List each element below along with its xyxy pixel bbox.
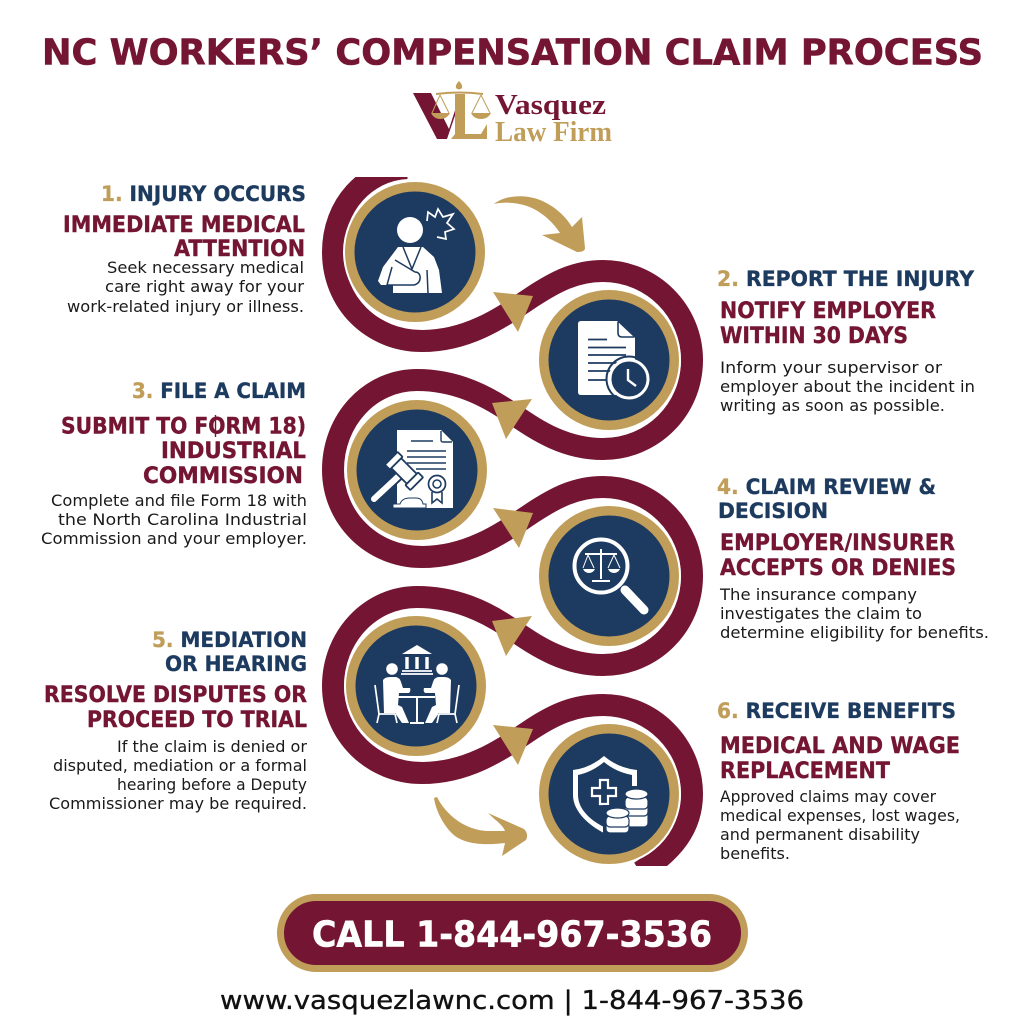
step 3 description: the North Carolina Industrial — [58, 510, 307, 529]
step 3 subheading: INDUSTRIAL — [161, 438, 306, 464]
step 6 subheading: MEDICAL AND WAGE — [720, 733, 960, 759]
arrow: curved gold top — [494, 196, 585, 252]
call to action button — [280, 898, 744, 968]
logo wordmark — [495, 90, 612, 148]
step 3 description: Complete and file Form 18 with — [51, 491, 307, 510]
step 5 subheading — [44, 682, 307, 733]
step 3 badge — [345, 398, 489, 542]
step 2 description: writing as soon as possible. — [720, 396, 945, 415]
step 2 subheading: NOTIFY EMPLOYER — [720, 298, 936, 324]
step 6 description: medical expenses, lost wages, — [720, 806, 960, 825]
call to action label: CALL 1-844-967-3536 — [312, 914, 712, 956]
step 4 badge — [537, 504, 681, 648]
panel: step 1 text — [63, 182, 306, 316]
icon: injured person — [378, 209, 454, 293]
step 4 heading: 4. CLAIM REVIEW & — [717, 475, 936, 499]
arrow: curved gold bottom — [434, 797, 527, 856]
step 6 description — [720, 787, 960, 863]
step 3 subheading — [61, 414, 306, 489]
step 2 heading: 2. REPORT THE INJURY — [717, 267, 975, 291]
panel: step 6 text — [717, 699, 960, 863]
icon: mediation at a table under courthouse — [375, 645, 459, 723]
step 2 subheading: WITHIN 30 DAYS — [720, 323, 908, 349]
step 4 subheading — [720, 530, 956, 581]
step 2 badge — [537, 288, 681, 432]
step 5 heading — [152, 628, 307, 676]
logo monogram — [413, 81, 491, 139]
step 4 description — [719, 585, 989, 642]
step 4 heading — [717, 475, 936, 523]
step 5 description: If the claim is denied or — [117, 737, 307, 756]
step 5 heading: OR HEARING — [165, 652, 307, 676]
step 5 subheading: PROCEED TO TRIAL — [87, 707, 307, 733]
step 6 subheading — [720, 733, 960, 784]
step 1 description — [67, 258, 304, 316]
step 4 subheading: EMPLOYER/INSURER — [720, 530, 955, 556]
icon: gavel and document — [374, 430, 453, 508]
ribbon arrowheads — [492, 292, 533, 765]
panel: step 5 text — [44, 628, 307, 813]
step 4 subheading: ACCEPTS OR DENIES — [720, 555, 956, 581]
icon: magnifier over scales — [574, 540, 644, 610]
step 5 heading: 5. MEDIATION — [152, 628, 307, 652]
step 6 description: benefits. — [720, 844, 790, 863]
icon: shield with cross and coins — [573, 756, 651, 835]
step 3 subheading: SUBMIT TO FORM 18) — [61, 414, 306, 440]
step 6 description: and permanent disability — [720, 825, 920, 844]
title: NC WORKERS’ COMPENSATION CLAIM PROCESS — [42, 32, 983, 74]
step 1 description: care right away for your — [105, 277, 304, 296]
step 6 description: Approved claims may cover — [720, 787, 936, 806]
panel: step 4 text — [717, 475, 989, 642]
step 4 description: investigates the claim to — [720, 604, 922, 623]
step 6 badge — [537, 722, 681, 866]
step 3 description — [41, 491, 307, 548]
step 5 description: hearing before a Deputy — [117, 775, 307, 794]
logo wordmark: Law Firm — [495, 117, 612, 148]
step 2 description: employer about the incident in — [720, 377, 975, 396]
step 1 heading: 1. INJURY OCCURS — [101, 182, 306, 206]
step 2 description: Inform your supervisor or — [720, 358, 942, 377]
step 1 subheading: ATTENTION — [174, 236, 305, 262]
step 1 badge — [343, 180, 487, 324]
icon: document with clock — [578, 321, 652, 402]
step 5 subheading: RESOLVE DISPUTES OR — [44, 682, 307, 708]
step 4 description: determine eligibility for benefits. — [720, 623, 989, 642]
step 2 subheading — [720, 298, 936, 349]
step 1 subheading — [63, 212, 305, 262]
step 2 description — [720, 358, 975, 415]
step 6 heading: 6. RECEIVE BENEFITS — [717, 699, 956, 723]
panel: step 2 text — [717, 267, 975, 415]
step 3 subheading: COMMISSION — [143, 463, 303, 489]
step 5 description: Commissioner may be required. — [49, 794, 307, 813]
step 4 description: The insurance company — [719, 585, 917, 604]
step 5 description — [49, 737, 307, 813]
step 3 heading: 3. FILE A CLAIM — [132, 379, 306, 403]
serpentine ribbon path — [333, 168, 692, 872]
step 4 heading: DECISION — [718, 499, 828, 523]
step 5 description: disputed, mediation or a formal — [53, 756, 307, 775]
step 1 description: work-related injury or illness. — [67, 297, 304, 316]
panel: step 3 text — [41, 379, 307, 548]
step 5 badge — [344, 614, 488, 758]
step 3 description: Commission and your employer. — [41, 529, 307, 548]
step 1 description: Seek necessary medical — [107, 258, 304, 277]
footer contact line: www.vasquezlawnc.com | 1-844-967-3536 — [220, 986, 804, 1016]
step 6 subheading: REPLACEMENT — [720, 758, 891, 784]
logo: Vasquez Law Firm — [413, 81, 612, 148]
step 1 subheading: IMMEDIATE MEDICAL — [63, 212, 305, 238]
logo wordmark: Vasquez — [495, 90, 606, 121]
